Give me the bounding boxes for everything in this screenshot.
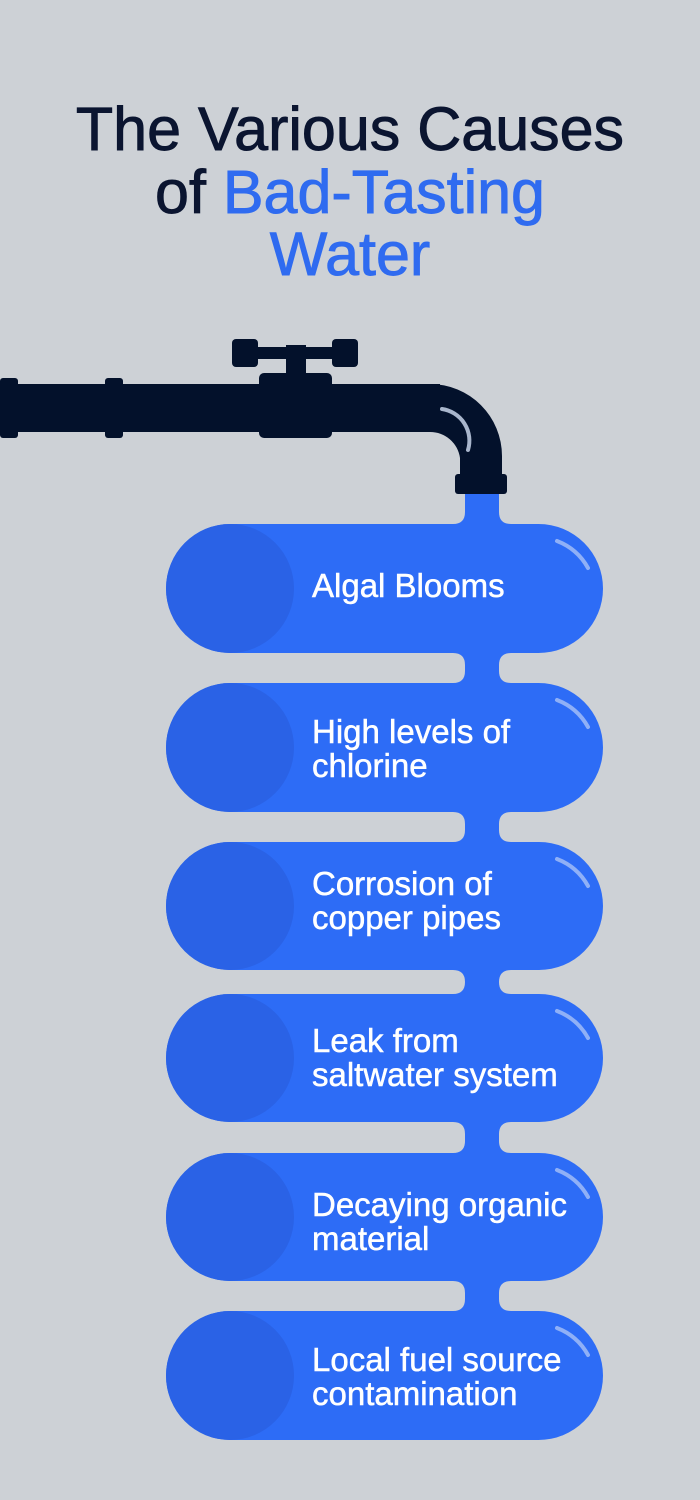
pill: Algal Blooms <box>166 524 603 653</box>
pill: Decaying organic material: Decaying organic <box>312 1186 567 1223</box>
pill: Local fuel source contamination <box>166 1311 603 1440</box>
water stream from faucet <box>453 494 511 524</box>
icon: faucet <box>0 339 507 494</box>
pill: Decaying organic material: material <box>312 1220 429 1257</box>
pill: Algal Blooms: Algal Blooms <box>312 567 505 604</box>
title <box>76 95 624 288</box>
pill: Local fuel source contamination: contamination <box>312 1375 517 1412</box>
pill: Leak from saltwater system: saltwater system <box>312 1056 558 1093</box>
pill: Corrosion of copper pipes <box>166 842 603 970</box>
pill: Leak from saltwater system <box>166 994 603 1122</box>
pill: High levels of chlorine <box>166 683 603 812</box>
pill: Local fuel source contamination: Local fuel source <box>312 1341 561 1378</box>
connectors between pills <box>453 653 511 1311</box>
pill: High levels of chlorine: chlorine <box>312 747 428 784</box>
pill: Leak from saltwater system: Leak from <box>312 1022 459 1059</box>
title: The Various Causes <box>76 95 624 163</box>
pill: High levels of chlorine: High levels of <box>312 713 511 750</box>
pill: Corrosion of copper pipes: copper pipes <box>312 899 501 936</box>
pill: Corrosion of copper pipes: Corrosion of <box>312 865 493 902</box>
title: Water <box>270 220 430 288</box>
pill: Decaying organic material <box>166 1153 603 1281</box>
title: of Bad-Tasting <box>155 158 545 226</box>
